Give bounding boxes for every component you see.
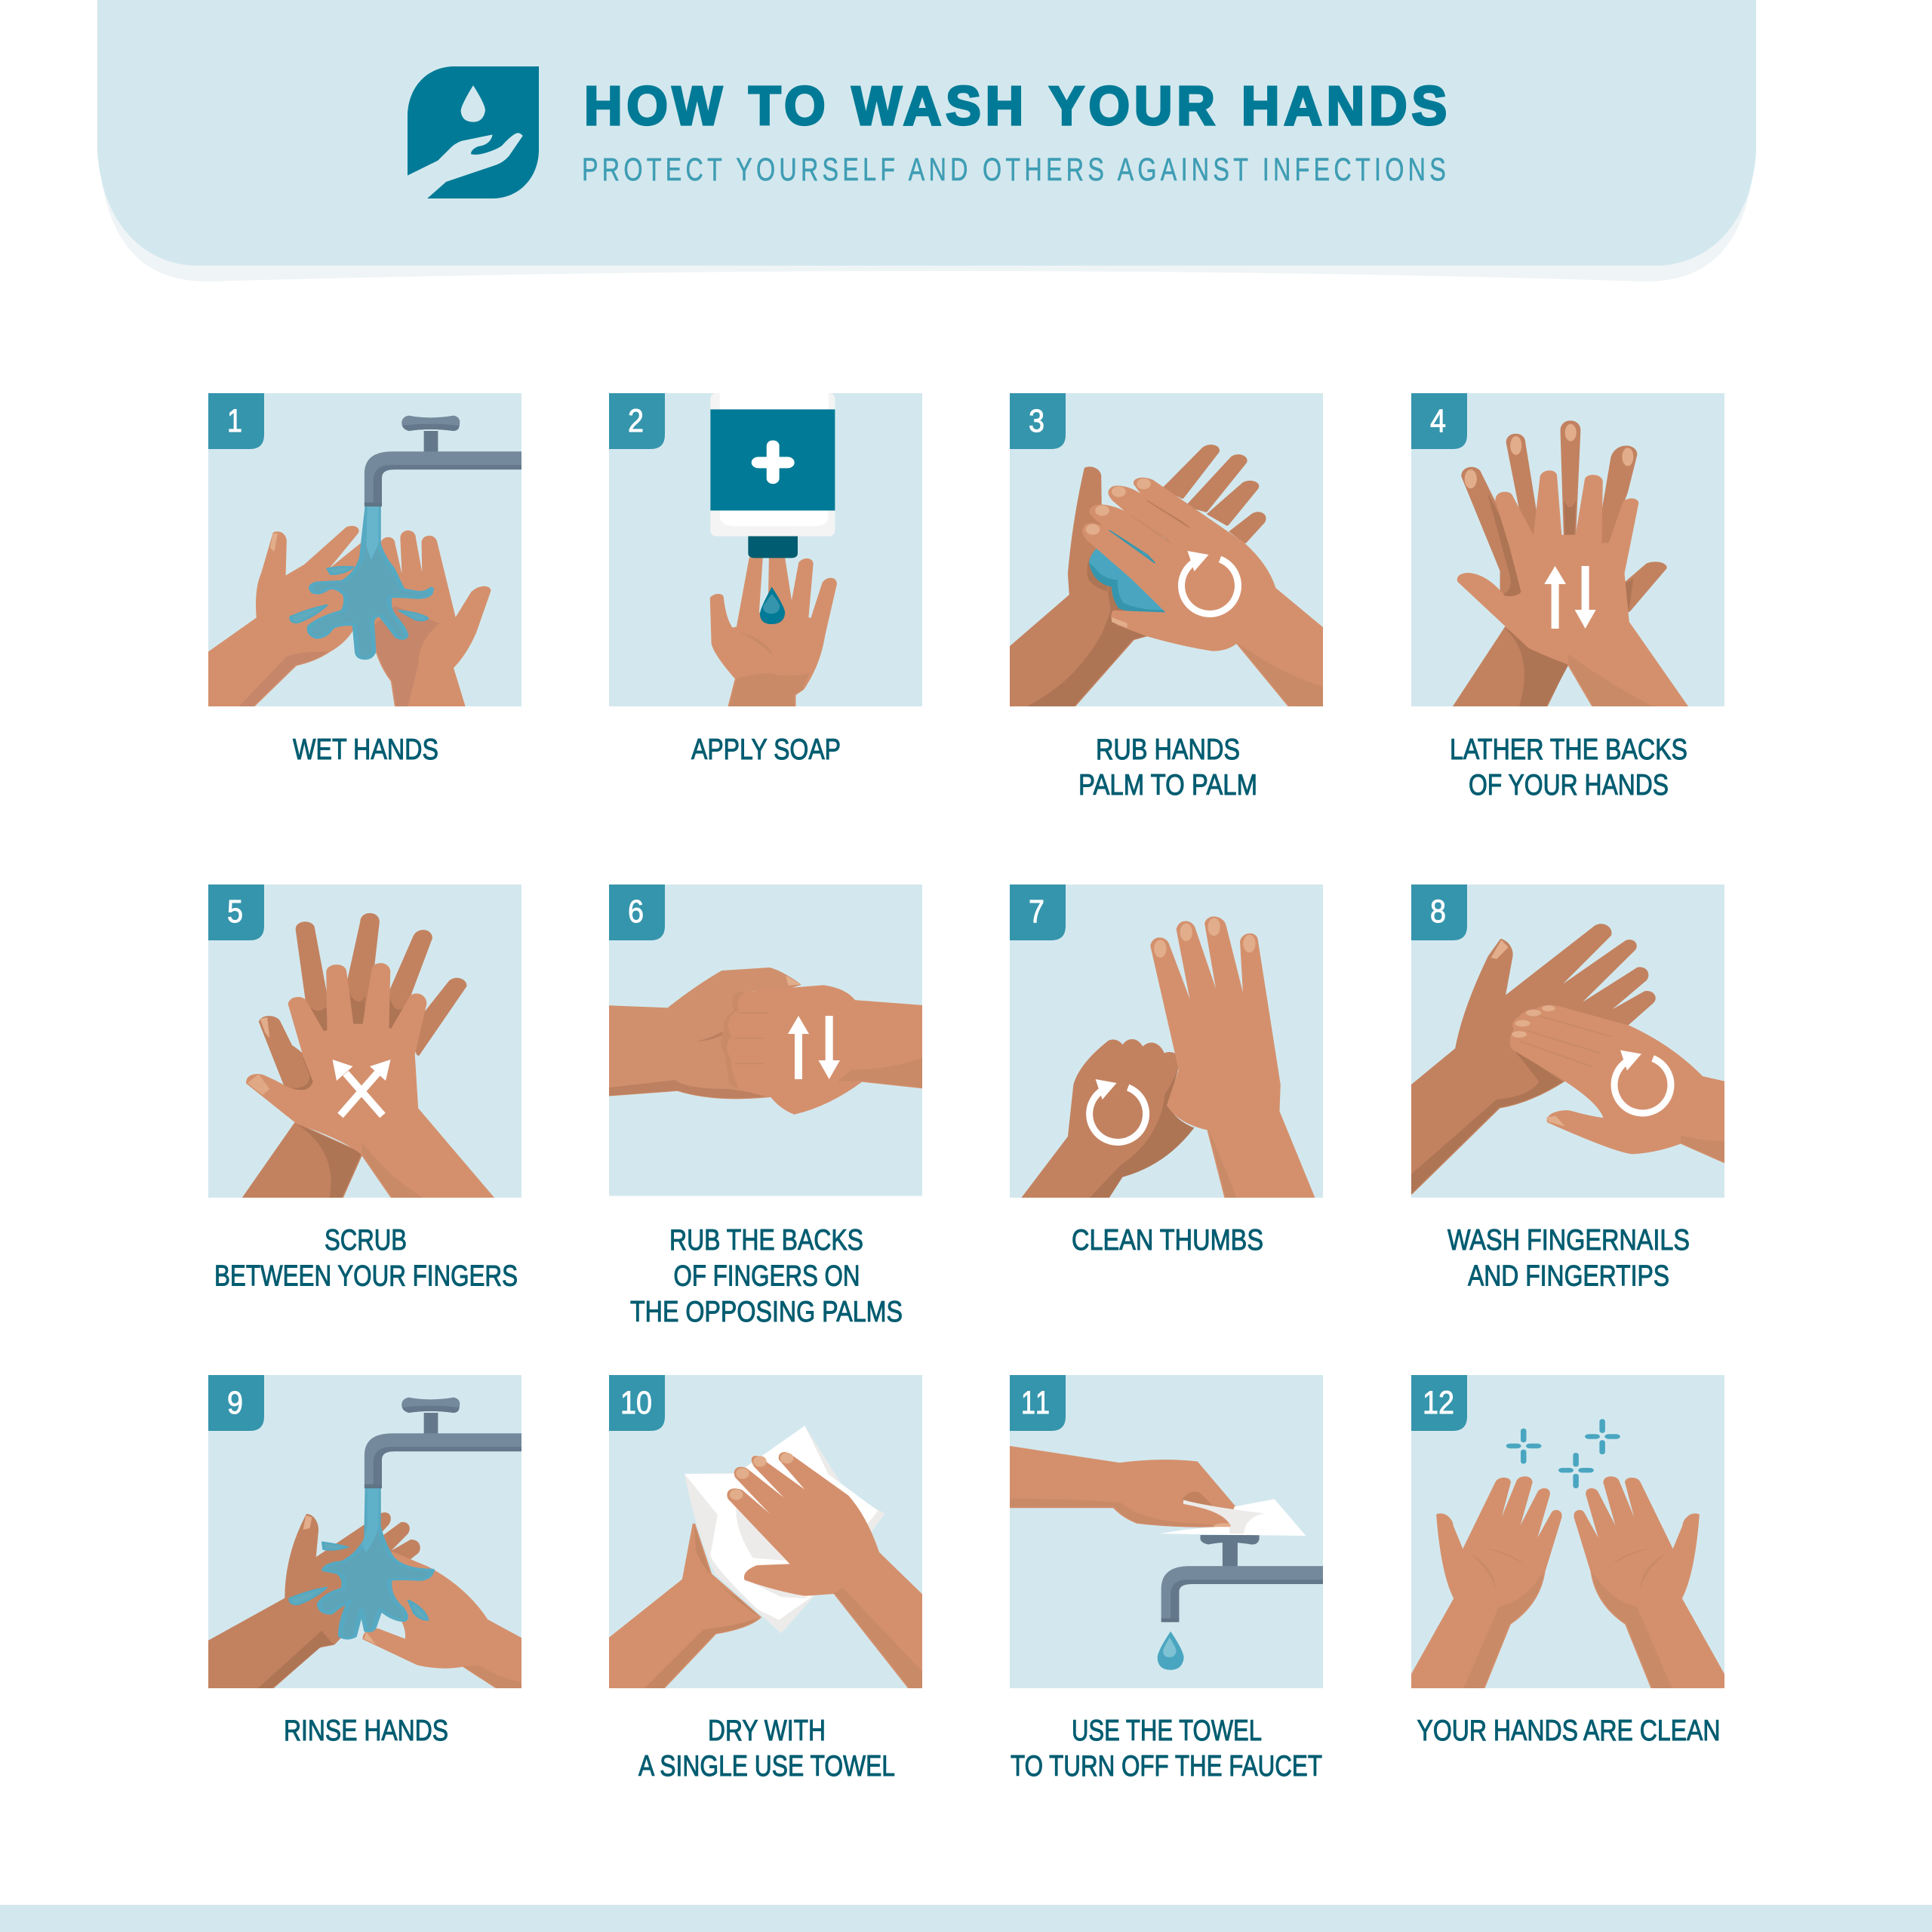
label [1450,734,1687,801]
arrows: up and down [1544,566,1596,629]
arrows: up and down [788,1016,840,1079]
label: USE THE TOWEL [1072,1715,1262,1747]
panel 1: wet hands [208,393,521,766]
badge 10 [609,1375,665,1431]
badge 6: 6 [628,894,644,930]
illustration: hand, towel, faucet, drop [1010,1375,1323,1688]
panel 4: lather the backs [1411,393,1724,801]
panel 10: dry with towel [609,1375,922,1783]
badge 2: 2 [628,403,644,439]
badge 3: 3 [1029,403,1044,439]
label [638,1715,895,1783]
illustration: soap dispenser and hand [609,393,922,706]
badge 9 [208,1375,264,1431]
badge 4 [1411,393,1467,449]
label: WET HANDS [293,734,438,766]
badge 7 [1010,884,1066,940]
label [1011,1715,1322,1783]
badge 10: 10 [620,1385,652,1421]
panel 5: scrub between fingers [208,884,521,1292]
illustration: faucet and wet hands [208,393,521,706]
panel 2: apply soap [609,393,922,766]
label: PALM TO PALM [1078,769,1257,801]
subtitle: PROTECT YOURSELF AND OTHERS AGAINST INFECTIONS [582,152,1450,188]
label: AND FINGERTIPS [1468,1260,1669,1292]
illustration: hands palm to palm with soap [1010,393,1323,706]
panel 8: wash fingernails [1411,884,1724,1292]
badge 5: 5 [227,894,243,930]
label: A SINGLE USE TOWEL [638,1750,895,1783]
badge 9: 9 [227,1385,243,1421]
badge 6 [609,884,665,940]
badge 5 [208,884,264,940]
badge 11 [1010,1375,1066,1431]
label: OF YOUR HANDS [1469,769,1669,801]
arrow: circular [1182,551,1238,614]
label [1078,734,1257,801]
label: RUB HANDS [1096,734,1240,766]
badge 1 [208,393,264,449]
illustration: fingertips on palm [1411,884,1724,1198]
label: OF FINGERS ON [673,1260,860,1292]
label [630,1224,903,1328]
panel 3: rub hands palm to palm [1010,393,1323,801]
label: RUB THE BACKS [669,1224,863,1257]
illustration: interlocked fists [609,884,922,1196]
title: HOW TO WASH YOUR HANDS [584,76,1451,137]
badge 7: 7 [1029,894,1044,930]
illustration: clean hands and sparkles [1411,1375,1724,1688]
label: THE OPPOSING PALMS [630,1296,903,1328]
label: YOUR HANDS ARE CLEAN [1417,1715,1721,1747]
panel 11: turn off faucet with towel [1010,1375,1323,1783]
label: CLEAN THUMBS [1072,1224,1263,1257]
badge 8 [1411,884,1467,940]
panel 9: rinse hands [208,1375,521,1747]
icon: hand and drop logo [408,66,539,198]
panel 7: clean thumbs [1010,884,1323,1257]
label: APPLY SOAP [691,734,841,766]
badge 11: 11 [1021,1385,1050,1421]
illustration: interlaced hands [208,884,521,1198]
label: WASH FINGERNAILS [1447,1224,1690,1257]
badge 4: 4 [1430,403,1446,439]
illustration: overlapping hands [1411,393,1724,706]
badge 8: 8 [1430,894,1446,930]
label: TO TURN OFF THE FAUCET [1011,1750,1322,1783]
footer band [0,1905,1932,1932]
label: SCRUB [325,1224,407,1257]
panel 6: rub backs of fingers [609,884,922,1328]
illustration: hands and paper towel [609,1375,922,1688]
illustration: fist around thumb [1010,884,1323,1198]
header banner [97,0,1756,281]
label: RINSE HANDS [284,1715,448,1747]
badge 3 [1010,393,1066,449]
badge 12: 12 [1423,1385,1454,1421]
arrow: circular [1614,1051,1671,1113]
illustration: faucet and rinsing hands [208,1375,521,1688]
badge 12 [1411,1375,1467,1431]
badge 2 [609,393,665,449]
label [214,1224,518,1292]
label: LATHER THE BACKS [1450,734,1687,766]
panel 12: hands are clean [1411,1375,1724,1747]
label: BETWEEN YOUR FINGERS [214,1260,518,1292]
label [1447,1224,1690,1292]
arrows: crossing [333,1060,391,1115]
arrow: circular [1090,1079,1146,1142]
label: DRY WITH [708,1715,826,1747]
badge 1: 1 [227,403,242,439]
